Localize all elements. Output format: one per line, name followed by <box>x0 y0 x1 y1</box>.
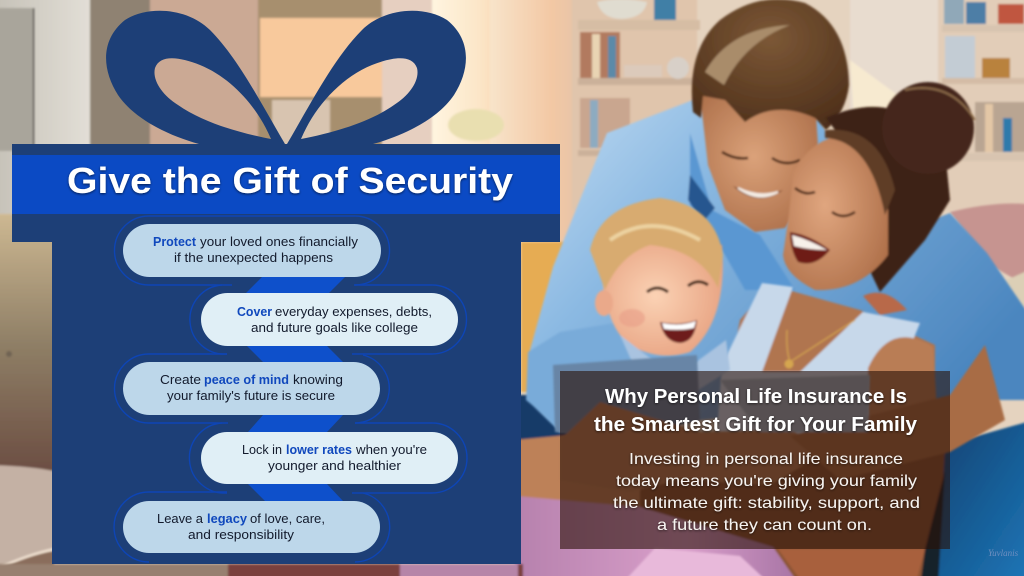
panel background <box>560 371 950 549</box>
icon: gift bow <box>106 11 466 144</box>
step 3: peace of mind: knowing <box>293 373 343 387</box>
step 5: legacy: legacy <box>207 512 247 526</box>
step 3: peace of mind: Create <box>160 373 201 387</box>
step 1: protect: Protect <box>153 235 197 249</box>
step 5: legacy: and responsibility <box>188 528 295 542</box>
woman: head and hair <box>783 82 975 292</box>
zigzag ribbon <box>246 277 345 501</box>
step 1: protect: your loved ones financially <box>200 235 359 249</box>
pill outlines <box>114 216 467 562</box>
panel body text: the ultimate gift: stability, support, and <box>613 495 920 512</box>
panel body text <box>613 451 920 534</box>
panel body text: Investing in personal life insurance <box>629 451 903 468</box>
step 5: legacy <box>123 501 380 553</box>
signature: Yuvlanis <box>988 548 1019 558</box>
child: head <box>590 198 730 395</box>
step 2: cover: and future goals like college <box>251 321 418 335</box>
man: shirt and arms <box>526 100 1024 432</box>
step 3: peace of mind: your family's future is secure <box>167 389 335 403</box>
step 2: cover: Cover <box>237 305 272 319</box>
panel: why personal life insurance <box>560 371 950 549</box>
step 1: protect: if the unexpected happens <box>174 251 333 265</box>
step 2: cover: everyday expenses, debts, <box>275 305 432 319</box>
step 4: lower rates: when you're <box>355 443 427 457</box>
step 5: legacy: Leave a <box>157 512 203 526</box>
gift box graphic <box>12 11 560 564</box>
panel heading <box>594 386 918 436</box>
step 4: lower rates: younger and healthier <box>268 459 401 473</box>
title band <box>12 155 560 214</box>
gift box body <box>52 242 521 564</box>
step 3: peace of mind <box>123 362 380 415</box>
arms in lower area <box>553 345 1005 492</box>
step 3: peace of mind: peace of mind <box>204 373 289 387</box>
step 2: cover <box>201 293 458 346</box>
gift box lid <box>12 144 560 242</box>
woman: body and top <box>716 283 938 445</box>
title: Give the Gift of Security <box>67 160 513 201</box>
step 1: protect <box>123 224 381 277</box>
man: head <box>692 0 849 232</box>
step 4: lower rates: lower rates <box>286 443 352 457</box>
step 5: legacy: of love, care, <box>250 512 325 526</box>
panel heading: the Smartest Gift for Your Family <box>594 414 918 436</box>
step 4: lower rates <box>201 432 458 484</box>
bookshelves <box>572 0 1024 210</box>
left sofa <box>0 214 54 576</box>
lower clothing and legs <box>0 395 1024 576</box>
panel body text: a future they can count on. <box>657 517 872 534</box>
step 4: lower rates: Lock in <box>242 443 282 457</box>
panel body text: today means you're giving your family <box>616 473 917 490</box>
sofa cushions <box>521 204 1024 392</box>
panel heading: Why Personal Life Insurance Is <box>605 386 907 408</box>
